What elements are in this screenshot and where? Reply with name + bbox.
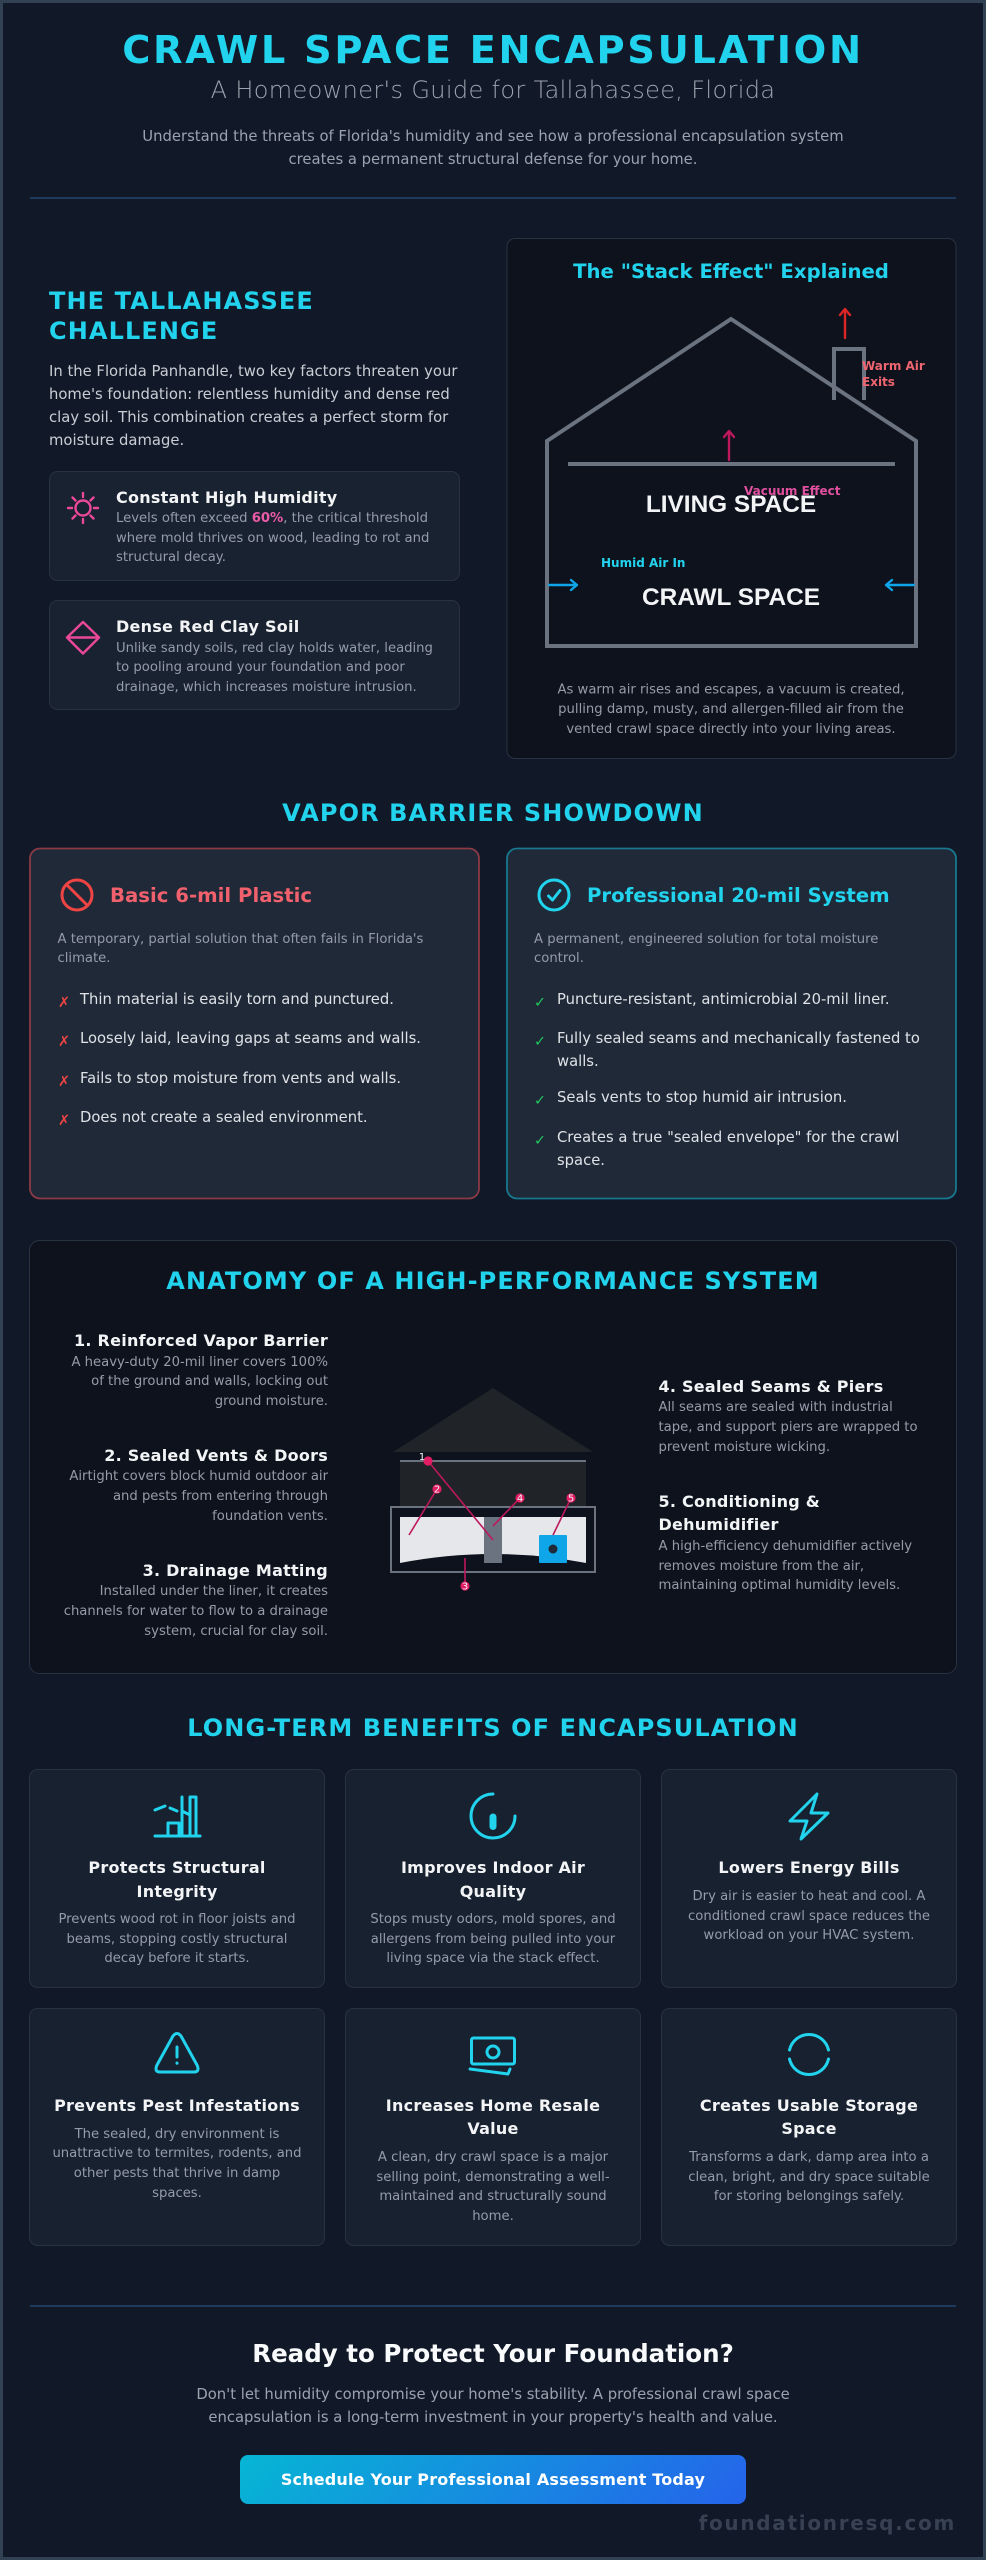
list: Does not create a sealed environment. bbox=[80, 1109, 368, 1126]
list: walls. bbox=[557, 1053, 599, 1070]
text block: right features: tape, and support piers are wrapped to bbox=[658, 1420, 918, 1435]
heading: The "Stack Effect" Explained bbox=[573, 260, 889, 283]
benefit: energy bills: conditioned crawl space reduces the bbox=[688, 1909, 930, 1924]
list: ✓ bbox=[534, 1093, 546, 1109]
intro paragraph: In the Florida Panhandle, two key factors threaten your bbox=[49, 363, 458, 380]
text block: left features: channels for water to flow to a drainage bbox=[64, 1604, 328, 1619]
text block: right features: prevent moisture wicking. bbox=[658, 1440, 830, 1455]
diagram: house: Vacuum Effect bbox=[744, 484, 841, 498]
list: space. bbox=[557, 1152, 605, 1169]
benefit: resale value: A clean, dry crawl space is a major bbox=[378, 2150, 609, 2165]
icon: diamond bbox=[67, 622, 99, 654]
list: ✗ bbox=[58, 1113, 70, 1129]
caption: As warm air rises and escapes, a vacuum is created, bbox=[557, 682, 905, 698]
panel: anatomy of a high-performance system bbox=[30, 1240, 956, 1674]
panel: the Tallahassee challenge bbox=[49, 287, 460, 710]
diagram: house: Humid Air In bbox=[601, 556, 685, 570]
list: ✗ bbox=[58, 1034, 70, 1050]
icon: prohibited bbox=[62, 880, 92, 910]
diagram: cross section of house: 4 bbox=[517, 1494, 523, 1504]
benefit: pest infestations: unattractive to termites, rodents, and bbox=[52, 2146, 302, 2161]
diagram: cross section of house bbox=[391, 1388, 595, 1592]
text block: right features: 4. Sealed Seams & Piers bbox=[658, 1377, 884, 1396]
panel: professional 20-mil system: control. bbox=[534, 951, 584, 966]
arrow: warm air exits bbox=[840, 309, 850, 338]
benefit: structural integrity: decay before it starts. bbox=[104, 1951, 250, 1966]
benefit: storage space: Space bbox=[781, 2119, 837, 2138]
intro text: Understand the threats of Florida's humidity and see how a professional encapsulation system bbox=[142, 128, 844, 145]
button bbox=[240, 2455, 746, 2504]
diagram: cross section of house: 2 bbox=[434, 1484, 440, 1496]
benefit: energy bills bbox=[662, 1770, 956, 1988]
icon: check circle bbox=[539, 880, 569, 910]
intro paragraph: moisture damage. bbox=[49, 432, 184, 449]
icon: sun bbox=[68, 493, 98, 523]
arrow: vacuum bbox=[724, 431, 734, 460]
panel: basic 6-mil plastic: climate. bbox=[58, 951, 110, 966]
text block: left features: 1. Reinforced Vapor Barrier bbox=[74, 1331, 328, 1350]
diagram: house: CRAWL SPACE bbox=[642, 584, 820, 611]
benefit: air quality: living space via the stack effect. bbox=[386, 1951, 600, 1966]
benefit: energy bills: Lowers Energy Bills bbox=[718, 1858, 900, 1877]
benefit: pest infestations: Prevents Pest Infestations bbox=[54, 2096, 300, 2115]
list bbox=[534, 991, 920, 1169]
list: ✗ bbox=[58, 1074, 70, 1090]
arrow: humid air left bbox=[549, 580, 577, 590]
text: encapsulation is a long-term investment in your property's health and value. bbox=[208, 2409, 778, 2426]
card: humidity: where mold thrives on wood, leading to rot and bbox=[116, 531, 429, 546]
benefit: air quality: allergens from being pulled into your bbox=[371, 1932, 616, 1947]
panel: professional 20-mil system: Professional 20-mil System bbox=[587, 884, 890, 907]
list: ✓ bbox=[534, 1034, 546, 1050]
benefit: pest infestations: spaces. bbox=[152, 2186, 202, 2201]
benefit: resale value: Value bbox=[467, 2119, 519, 2138]
benefit: energy bills: workload on your HVAC system. bbox=[704, 1928, 914, 1943]
list: Creates a true "sealed envelope" for the crawl bbox=[557, 1129, 899, 1146]
benefit: air quality: Quality bbox=[460, 1882, 527, 1901]
panel: professional 20-mil system bbox=[507, 848, 956, 1198]
benefit: resale value: maintained and structurally sound bbox=[379, 2189, 607, 2204]
call to action bbox=[196, 2339, 790, 2504]
card: clay soil: Dense Red Clay Soil bbox=[116, 617, 299, 636]
diagram: cross section of house: 3 bbox=[462, 1582, 468, 1592]
heading: vapor barrier showdown: VAPOR BARRIER SHOWDOWN bbox=[282, 799, 704, 827]
text block: left features: and pests from entering through bbox=[113, 1489, 328, 1504]
text: Don't let humidity compromise your home's stability. A professional crawl space bbox=[196, 2386, 790, 2403]
benefit: resale value: Increases Home Resale bbox=[386, 2096, 600, 2115]
text block: left features: A heavy-duty 20-mil liner covers 100% bbox=[71, 1355, 328, 1370]
panel: basic 6-mil plastic: A temporary, partial solution that often fails in Florida's bbox=[58, 932, 424, 947]
text block: left features: Airtight covers block humid outdoor air bbox=[69, 1469, 329, 1484]
list: ✓ bbox=[534, 995, 546, 1011]
benefit: resale value bbox=[346, 2008, 640, 2246]
list: Fails to stop moisture from vents and walls. bbox=[80, 1070, 401, 1087]
text block: right features: maintaining optimal humidity levels. bbox=[658, 1578, 900, 1593]
list: Fully sealed seams and mechanically fastened to bbox=[557, 1030, 920, 1047]
button: Schedule Your Professional Assessment Today bbox=[281, 2470, 706, 2489]
list: Loosely laid, leaving gaps at seams and walls. bbox=[80, 1030, 421, 1047]
list bbox=[58, 991, 421, 1129]
benefit: storage space: for storing belongings safely. bbox=[714, 2189, 904, 2204]
arrow: humid air right bbox=[886, 580, 914, 590]
panel: basic 6-mil plastic bbox=[30, 848, 479, 1198]
card: clay soil: to pooling around your foundation and poor bbox=[116, 660, 405, 675]
list: Puncture-resistant, antimicrobial 20-mil liner. bbox=[557, 991, 890, 1008]
card: clay soil: drainage, which increases moisture intrusion. bbox=[116, 680, 417, 695]
benefit: structural integrity: Protects Structural bbox=[88, 1858, 266, 1877]
benefit: storage space: clean, bright, and dry space suitable bbox=[688, 2170, 930, 2185]
card: humidity bbox=[50, 472, 460, 580]
heading: THE TALLAHASSEE bbox=[49, 287, 314, 315]
text block: left features bbox=[64, 1331, 329, 1639]
list: ✓ bbox=[534, 1133, 546, 1149]
subtitle: A Homeowner's Guide for Tallahassee, Florida bbox=[211, 76, 775, 104]
intro paragraph: clay soil. This combination creates a perfect storm for bbox=[49, 409, 449, 426]
icon: lightning bolt bbox=[790, 1794, 828, 1839]
text block: right features: Dehumidifier bbox=[658, 1515, 779, 1534]
caption: pulling damp, musty, and allergen-filled air from the bbox=[558, 702, 904, 717]
benefit: structural integrity: Prevents wood rot in floor joists and bbox=[58, 1912, 296, 1927]
heading: ANATOMY OF A HIGH-PERFORMANCE SYSTEM bbox=[166, 1267, 820, 1295]
benefit: pest infestations: The sealed, dry environment is bbox=[74, 2127, 280, 2142]
intro text: creates a permanent structural defense for your home. bbox=[289, 151, 697, 168]
text block: left features: 2. Sealed Vents & Doors bbox=[104, 1446, 328, 1465]
benefit: air quality: Stops musty odors, mold spores, and bbox=[370, 1912, 616, 1927]
intro paragraph: home's foundation: relentless humidity and dense red bbox=[49, 386, 450, 403]
icon: circular arcs bbox=[790, 2034, 828, 2075]
benefit: resale value: home. bbox=[472, 2209, 514, 2224]
text block: right features bbox=[658, 1377, 918, 1593]
benefit: storage space bbox=[662, 2008, 956, 2246]
header bbox=[122, 28, 864, 168]
card: humidity: Constant High Humidity bbox=[116, 488, 338, 507]
text block: right features: removes moisture from the air, bbox=[658, 1559, 864, 1574]
diagram: house: LIVING SPACE bbox=[646, 491, 816, 518]
benefit: structural integrity bbox=[30, 1770, 324, 1988]
benefit: energy bills: Dry air is easier to heat and cool. A bbox=[693, 1889, 925, 1904]
diagram: cross section of house: 1 bbox=[419, 1452, 425, 1463]
text block: left features: foundation vents. bbox=[212, 1509, 328, 1524]
text block: left features: Installed under the liner, it creates bbox=[100, 1584, 328, 1599]
card: humidity: 60%, the critical threshold bbox=[252, 511, 428, 526]
caption: vented crawl space directly into your living areas. bbox=[566, 722, 896, 737]
panel: professional 20-mil system: A permanent, engineered solution for total moisture bbox=[534, 932, 878, 947]
benefit: storage space: Transforms a dark, damp area into a bbox=[688, 2150, 929, 2165]
list: ✗ bbox=[58, 995, 70, 1011]
benefit: pest infestations bbox=[30, 2008, 324, 2246]
diagram: house: Warm Air bbox=[862, 359, 925, 373]
card: humidity: Levels often exceed bbox=[116, 511, 252, 526]
icon: banknote bbox=[470, 2038, 514, 2074]
panel: basic 6-mil plastic: Basic 6-mil Plastic bbox=[110, 884, 312, 907]
text block: right features: 5. Conditioning & bbox=[658, 1492, 820, 1511]
benefit: structural integrity: Integrity bbox=[136, 1882, 218, 1901]
icon: warning triangle bbox=[156, 2034, 198, 2072]
heading: CHALLENGE bbox=[49, 317, 218, 345]
diagram: house: Exits bbox=[862, 375, 895, 389]
text block: left features: of the ground and walls, locking out bbox=[91, 1374, 328, 1389]
card: clay soil bbox=[50, 600, 460, 710]
diagram: house bbox=[547, 309, 925, 646]
card: clay soil: Unlike sandy soils, red clay holds water, leading bbox=[116, 641, 433, 656]
benefit: structural integrity: beams, stopping costly structural bbox=[67, 1932, 287, 1947]
title: CRAWL SPACE ENCAPSULATION bbox=[122, 28, 864, 73]
benefit: air quality bbox=[346, 1770, 640, 1988]
icon: building bbox=[155, 1797, 200, 1836]
benefit: storage space: Creates Usable Storage bbox=[700, 2096, 918, 2115]
benefit: resale value: selling point, demonstrating a well- bbox=[376, 2170, 610, 2185]
list: Seals vents to stop humid air intrusion. bbox=[557, 1089, 847, 1106]
benefit: air quality: Improves Indoor Air bbox=[401, 1858, 585, 1877]
text block: left features: ground moisture. bbox=[215, 1394, 328, 1409]
text block: right features: All seams are sealed with industrial bbox=[658, 1400, 893, 1415]
text block: left features: system, crucial for clay soil. bbox=[144, 1624, 328, 1639]
watermark: foundationresq.com bbox=[699, 2511, 956, 2535]
text block: right features: A high-efficiency dehumidifier actively bbox=[658, 1539, 912, 1554]
heading: long-term benefits: LONG-TERM BENEFITS OF ENCAPSULATION bbox=[187, 1714, 799, 1742]
benefit: pest infestations: other pests that thrive in damp bbox=[74, 2166, 280, 2181]
diagram: cross section of house: 5 bbox=[568, 1494, 574, 1504]
heading: Ready to Protect Your Foundation? bbox=[252, 2339, 734, 2368]
list: Thin material is easily torn and punctured. bbox=[79, 991, 394, 1008]
icon: gauge bbox=[471, 1794, 515, 1838]
card: humidity: structural decay. bbox=[116, 550, 226, 565]
panel: benefits grid bbox=[30, 1770, 956, 2246]
panel: stack effect bbox=[507, 238, 956, 758]
text block: left features: 3. Drainage Matting bbox=[143, 1561, 328, 1580]
